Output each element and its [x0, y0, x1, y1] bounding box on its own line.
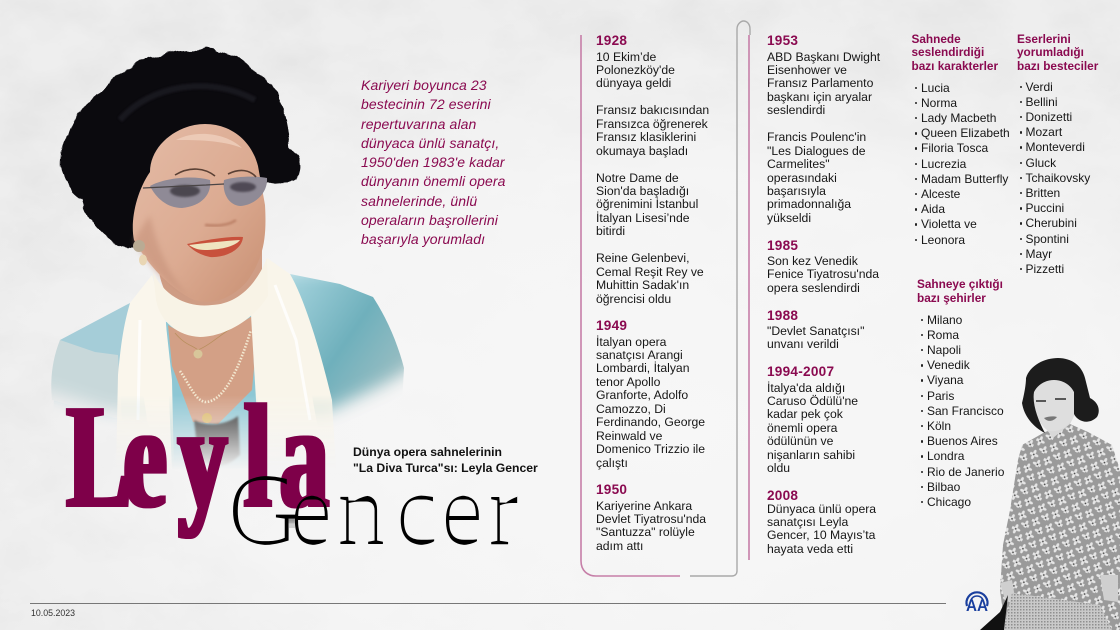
scarf wrap — [153, 258, 268, 337]
1953 events: Francis Poulenc'in — [767, 130, 866, 144]
1949 events: Ferdinando, George — [596, 415, 705, 429]
1994-2007 events: kadar pek çok — [767, 407, 843, 421]
1928 events: Reine Gelenbevi, — [596, 251, 690, 265]
1950 events: Devlet Tiyatrosu'nda — [596, 512, 706, 526]
hair — [61, 48, 301, 250]
cities list: Rio de Janerio — [927, 465, 1004, 479]
1928 events: Fransız bakıcısından — [596, 103, 709, 117]
cities heading: Sahneye çıktığı — [917, 277, 1003, 291]
1985 events: opera seslendirdi — [767, 281, 860, 295]
intro text: dünyaca ünlü sanatçı, — [361, 135, 499, 151]
1985 events: Fenice Tiyatrosu'nda — [767, 267, 879, 281]
intro text: bestecinin 72 eserini — [361, 96, 491, 112]
earring — [133, 240, 147, 266]
blouse, chest and necklace — [166, 314, 262, 470]
1928 events: Cemal Reşit Rey ve — [596, 265, 704, 279]
dress — [1000, 424, 1120, 630]
characters heading: bazı karakterler — [912, 58, 998, 72]
composers list: Bellini — [1026, 95, 1058, 109]
year 2008: 2008 — [767, 488, 798, 502]
year 1928: 1928 — [596, 33, 627, 48]
cities list: Roma — [927, 328, 959, 342]
intro text: repertuvarına alan — [361, 116, 476, 132]
1928 events: Notre Dame de — [596, 171, 679, 185]
1950 events: adım attı — [596, 539, 643, 553]
1953 events: Fransız Parlamento — [767, 76, 873, 90]
cities list: Bilbao — [927, 480, 960, 494]
1953 events: başkanı için aryalar — [767, 90, 872, 104]
1994-2007 events: oldu — [767, 461, 790, 475]
timeline column 2 — [767, 33, 880, 556]
intro text: 1950'den 1983'e kadar — [361, 154, 505, 170]
footer rule — [30, 603, 946, 604]
characters list: Aida — [921, 202, 945, 216]
1953 events: başarısıyla — [767, 184, 826, 198]
composers list: Mayr — [1026, 247, 1052, 261]
1949 events: Lombardi, İtalyan — [596, 361, 690, 375]
cities list: San Francisco — [927, 404, 1004, 418]
neck and face — [1047, 418, 1073, 438]
cities list: Buenos Aires — [927, 434, 998, 448]
1949 events: Reinwald ve — [596, 429, 662, 443]
1953 events: ABD Başkanı Dwight — [767, 50, 880, 64]
1928 events: öğrenimini İstanbul — [596, 197, 698, 211]
composers list: Monteverdi — [1026, 140, 1085, 154]
hair — [1022, 358, 1099, 433]
1928 events: Sion'da başladığı — [596, 184, 689, 198]
year 1985: 1985 — [767, 238, 798, 252]
intro text: operaların başrollerini — [361, 212, 498, 228]
cities list: Milano — [927, 312, 962, 326]
characters list: Lucrezia — [921, 157, 966, 171]
face — [133, 124, 265, 302]
1928 events: öğrencisi oldu — [596, 292, 671, 306]
year 1949: 1949 — [596, 318, 627, 332]
1950 events: Kariyerine Ankara — [596, 498, 692, 512]
1928 events: okumaya başladı — [596, 144, 688, 158]
year 1994-2007: 1994-2007 — [767, 364, 834, 379]
intro text: sahnelerinde, ünlü — [361, 193, 477, 209]
date: 10.05.2023 — [31, 608, 75, 618]
1928 events: Fransızca öğrenerek — [596, 117, 708, 131]
jacket — [51, 274, 404, 420]
intro text: dünyanın önemli opera — [361, 173, 506, 189]
portrait photo of Leyla Gencer — [51, 46, 404, 466]
cities list: Venedik — [927, 358, 970, 372]
1949 events — [596, 334, 705, 470]
1949 events: Camozzo, Di — [596, 402, 666, 416]
1953 events: Eisenhower ve — [767, 63, 847, 77]
1994-2007 events — [767, 380, 858, 475]
1994-2007 events: Caruso Ödülü'ne — [767, 394, 858, 408]
composers heading: Eserlerini — [1017, 32, 1071, 46]
1928 events: 10 Ekim’de — [596, 50, 656, 64]
cities list: Londra — [927, 449, 964, 463]
2008 events: Dünyaca ünlü opera — [767, 502, 876, 516]
subtitle: "La Diva Turca"sı: Leyla Gencer — [353, 461, 538, 475]
cities list: Napoli — [927, 343, 961, 357]
year 1988: 1988 — [767, 308, 798, 322]
characters list: Violetta ve — [921, 217, 977, 231]
1928 events: Muhittin Sadak'ın — [596, 278, 689, 292]
cities list: Köln — [927, 419, 951, 433]
1988 events: "Devlet Sanatçısı" — [767, 324, 864, 338]
neck — [158, 250, 262, 315]
nose and mouth — [187, 220, 243, 257]
composers list — [1020, 80, 1090, 276]
2008 events: Gencer, 10 Mayıs’ta — [767, 528, 875, 542]
characters list: Leonora — [921, 233, 965, 247]
intro text: başarıyla yorumladı — [361, 231, 485, 247]
1928 events: bitirdi — [596, 224, 625, 238]
hands — [1000, 580, 1015, 603]
composers heading: bazı besteciler — [1017, 58, 1098, 72]
composers heading — [1017, 32, 1098, 72]
1953 events — [767, 50, 880, 225]
1994-2007 events: İtalya'da aldığı — [767, 380, 845, 394]
characters heading — [912, 32, 998, 72]
cities heading — [917, 277, 1003, 304]
2008 events — [767, 502, 876, 556]
cities list: Viyana — [927, 373, 963, 387]
composers list: Britten — [1026, 186, 1060, 200]
Leyla: Leyla — [67, 375, 329, 539]
1928 events: İtalyan Lisesi’nde — [596, 211, 690, 225]
characters list: Alceste — [921, 187, 960, 201]
intro text: Kariyeri boyunca 23 — [361, 77, 487, 93]
composers list: Gluck — [1026, 156, 1056, 170]
characters heading: seslendirdiği — [912, 45, 984, 59]
characters list: Norma — [921, 96, 957, 110]
characters list: Lady Macbeth — [921, 111, 996, 125]
cities heading: bazı şehirler — [917, 290, 986, 304]
composers list: Pizzetti — [1026, 262, 1064, 276]
sunglasses — [143, 169, 267, 208]
bag — [1003, 593, 1112, 630]
AA logo: AA — [966, 596, 988, 615]
composers list: Cherubini — [1026, 216, 1077, 230]
1994-2007 events: önemli opera — [767, 421, 837, 435]
eyes and lips — [1036, 399, 1066, 401]
composers list: Donizetti — [1026, 110, 1072, 124]
cities list: Chicago — [927, 495, 971, 509]
1950 events: "Santuzza" rolüyle — [596, 525, 695, 539]
subtitle: Dünya opera sahnelerinin — [353, 445, 502, 459]
1994-2007 events: nişanların sahibi — [767, 448, 855, 462]
2008 events: hayata veda etti — [767, 542, 853, 556]
1949 events: Domenico Trizzio ile — [596, 442, 705, 456]
cities list — [921, 312, 1004, 509]
composers list: Spontini — [1026, 232, 1069, 246]
composers list: Verdi — [1026, 80, 1053, 94]
1953 events: yükseldi — [767, 211, 811, 225]
1985 events — [767, 254, 880, 295]
1994-2007 events: ödülünün ve — [767, 434, 833, 448]
1949 events: çalıştı — [596, 456, 628, 470]
year 1950: 1950 — [596, 482, 627, 496]
1953 events: primadonnalığa — [767, 197, 851, 211]
composers list: Puccini — [1026, 201, 1064, 215]
1949 events: Granforte, Adolfo — [596, 388, 688, 402]
characters heading: Sahnede — [912, 32, 961, 46]
1988 events: unvanı verildi — [767, 337, 839, 351]
characters list — [915, 80, 1010, 247]
intro text — [361, 77, 506, 247]
timeline column 1 — [596, 33, 709, 553]
year 1953: 1953 — [767, 33, 798, 48]
cities list: Paris — [927, 389, 954, 403]
scarf — [117, 258, 333, 451]
composers list: Tchaikovsky — [1026, 171, 1090, 185]
characters list: Filoria Tosca — [921, 141, 988, 155]
composers heading: yorumladığı — [1017, 45, 1084, 59]
1953 events: operasındaki — [767, 171, 837, 185]
1928 events: Fransız klasiklerini — [596, 130, 696, 144]
1950 events — [596, 498, 706, 553]
1953 events: "Les Dialogues de — [767, 144, 866, 158]
characters list: Queen Elizabeth — [921, 126, 1010, 140]
1949 events: sanatçısı Arangi — [596, 348, 683, 362]
1988 events — [767, 324, 864, 351]
1928 events: dünyaya geldi — [596, 76, 671, 90]
2008 events: sanatçısı Leyla — [767, 515, 848, 529]
1928 events: Polonezköy'de — [596, 63, 675, 77]
1953 events: seslendirdi — [767, 103, 825, 117]
1985 events: Son kez Venedik — [767, 254, 858, 268]
Gencer: Gencer — [226, 453, 521, 567]
subtitle — [353, 445, 538, 475]
composers list: Mozart — [1026, 125, 1062, 139]
1953 events: Carmelites" — [767, 157, 830, 171]
1949 events: İtalyan opera — [596, 334, 666, 348]
characters list: Madam Butterfly — [921, 172, 1008, 186]
1949 events: tenor Apollo — [596, 375, 660, 389]
1928 events — [596, 50, 709, 306]
characters list: Lucia — [921, 80, 950, 94]
